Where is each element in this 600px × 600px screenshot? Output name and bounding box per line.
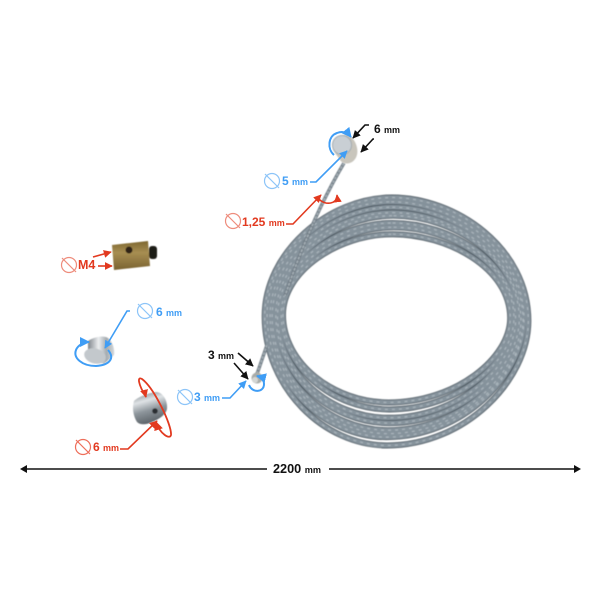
black dimension arrows bbox=[234, 353, 253, 379]
length label: 2200 mm bbox=[273, 462, 321, 476]
label: diameter 6 mm: 6 mm bbox=[93, 440, 119, 454]
small nipple at lower cable end bbox=[178, 348, 264, 404]
left arrow bbox=[20, 465, 267, 473]
cable end: lower bbox=[257, 345, 267, 374]
black screw end bbox=[149, 246, 157, 259]
label: 3 mm: 3 mm bbox=[208, 348, 234, 362]
red loop arrows bbox=[139, 378, 171, 437]
label: diameter 5 mm: 5 mm bbox=[282, 174, 308, 188]
label: 6 mm: 6 mm bbox=[374, 122, 400, 136]
cable end: upper bbox=[285, 163, 344, 296]
silver nipple with blue dimension bbox=[75, 304, 182, 366]
label: diameter M4 bbox=[62, 252, 112, 272]
brass body bbox=[112, 241, 150, 270]
red leader bbox=[120, 421, 157, 449]
black dimension arrows bbox=[353, 125, 374, 152]
blue leader bbox=[105, 311, 130, 348]
blue loop arrow bbox=[329, 132, 351, 155]
overall length dimension bbox=[20, 462, 581, 476]
nipple body bbox=[252, 372, 262, 384]
blue loop arrow bbox=[75, 342, 111, 366]
top nipple with dimensions bbox=[329, 122, 400, 163]
label: diameter 1,25 mm: 1,25 mm bbox=[242, 215, 285, 229]
nipple body bbox=[82, 337, 114, 366]
label: diameter 1,25 mm bbox=[226, 195, 337, 229]
blue leader bbox=[222, 381, 246, 398]
blue loop arrow bbox=[249, 376, 264, 391]
coiled steel cable bbox=[257, 163, 528, 445]
label: diameter 3 mm: 3 mm bbox=[194, 390, 220, 404]
brass nipple M4 bbox=[112, 241, 157, 270]
nipple body bbox=[332, 135, 357, 163]
right arrow bbox=[329, 465, 581, 473]
label: diameter M4: M4 bbox=[78, 258, 95, 272]
nipple body bbox=[133, 392, 167, 424]
label: diameter 6 mm: 6 mm bbox=[156, 305, 182, 319]
chrome barrel nipple with red dimension bbox=[76, 378, 171, 454]
label: diameter 5 mm bbox=[264, 151, 347, 188]
